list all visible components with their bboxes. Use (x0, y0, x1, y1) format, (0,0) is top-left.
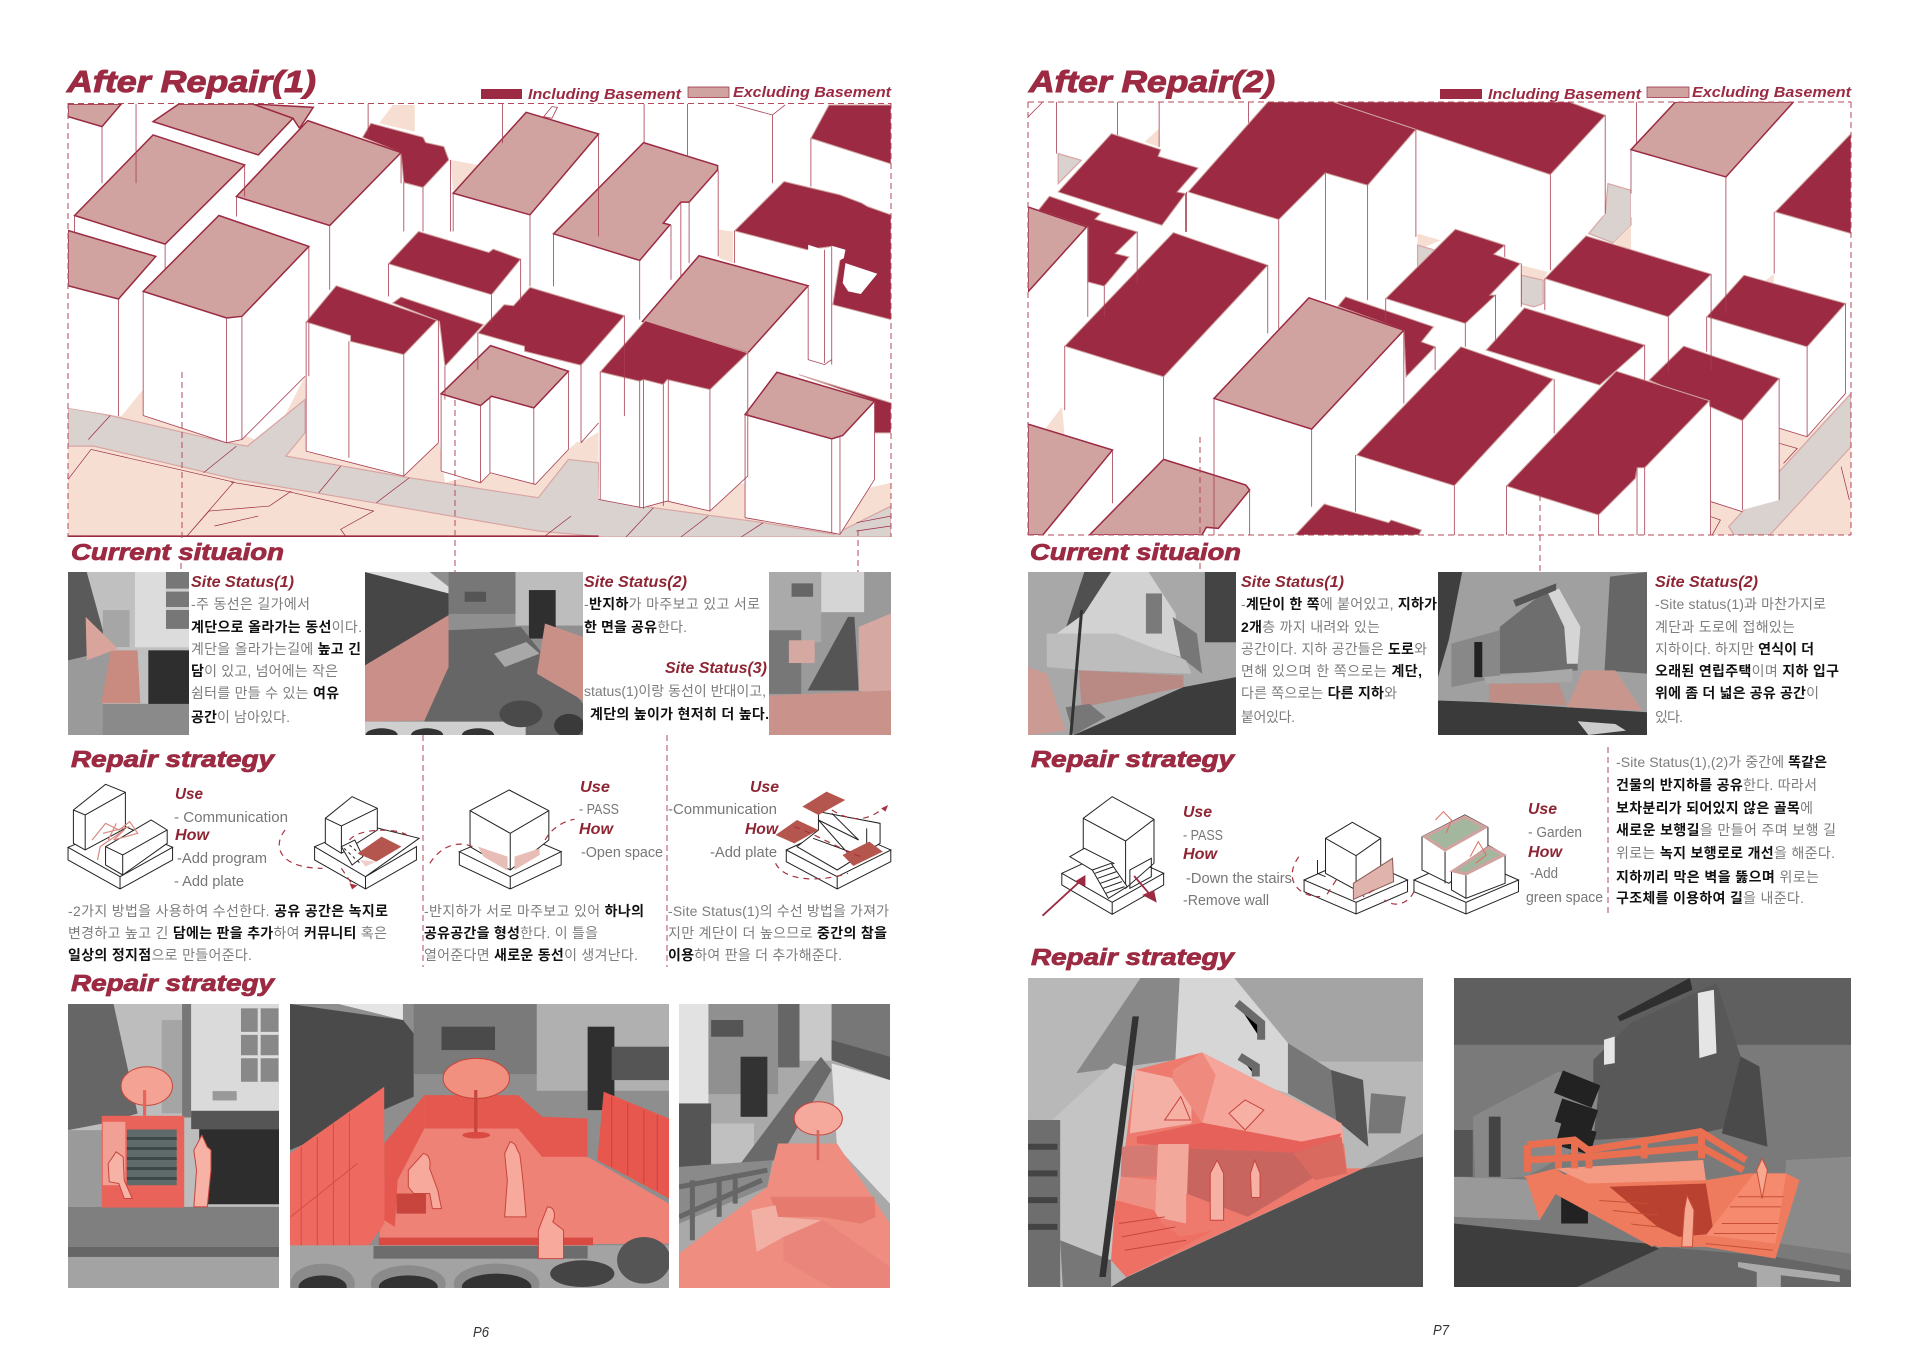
labels: communication and add plate: -Communication (668, 801, 777, 818)
diagram: communication and plates on stepped stair (776, 792, 891, 889)
text: strategy paragraph 2 left (424, 903, 644, 963)
photo: repair render D (1028, 978, 1423, 1287)
text: site status 3 left (584, 660, 769, 722)
photo: repair render C (679, 1004, 890, 1288)
text: site status 1 left: Site Status(1) (191, 574, 294, 591)
labels: pass and open space (579, 779, 663, 861)
text: site status 1 right: 붙어있다. (1241, 709, 1295, 725)
text: site status 1 left: 계단을 올라가는길에 높고 긴 (191, 641, 361, 657)
labels: pass and open space: - PASS (579, 801, 619, 818)
labels: communication and add plate: How (745, 821, 780, 838)
title: After Repair(1): After Repair(1) (66, 64, 316, 99)
text: site status 1 right: Site Status(1) (1241, 574, 1344, 591)
text: site status 2 right: 오래된 연립주택이며 지하 입구 (1655, 663, 1839, 679)
text: site status 1 right: -계단이 한 쪽에 붙어있고, 지하가 (1241, 596, 1437, 612)
text: strategy paragraph right: 새로운 보행길을 만들어 주며 보행 길 (1616, 822, 1836, 838)
legend: left page: Excluding Basement (733, 84, 892, 101)
text: strategy paragraph 1 left: 변경하고 높고 긴 담에는 판을 추가하여 커뮤니티 혹은 (68, 925, 387, 941)
legend: left page: Including Basement (528, 86, 682, 103)
text: site status 1 right: 2개층 까지 내려와 있는 (1241, 619, 1380, 635)
arrows: dashed circulation for first diagrams (279, 830, 408, 889)
page number P7: P7 (1433, 1322, 1450, 1339)
text: site status 2 left: Site Status(2) (584, 574, 687, 591)
photo: site status 2 left (365, 572, 583, 735)
labels: down the stairs: Use (1183, 804, 1212, 821)
labels: first diagram use and how: - Communication (174, 809, 288, 826)
heading: repair strategy 2 right: Repair strategy (1031, 944, 1235, 970)
text: strategy paragraph 1 left: 일상의 정지점으로 만들어준다. (68, 947, 252, 963)
frame and leader lines: right page (1028, 102, 1851, 917)
text: site status 2 left: 한 면을 공유한다. (584, 619, 687, 635)
labels: pass and open space: -Open space (581, 844, 663, 861)
text: site status 2 right: 계단과 도로에 접해있는 (1655, 619, 1795, 635)
legend: left page (481, 84, 892, 103)
text: site status 1 right: 공간이다. 지하 공간들은 도로와 (1241, 641, 1427, 657)
text: strategy paragraph right (1616, 754, 1836, 906)
text: strategy paragraph 3 left: -Site Status(1)의 수선 방법을 가져가 (668, 903, 889, 919)
text: site status 3 left: 계단의 높이가 현저히 더 높다. (590, 706, 769, 722)
text: strategy paragraph right: 지하끼리 막은 벽을 뚫으며 위로는 (1616, 869, 1819, 885)
diagram: down the stairs building (1043, 797, 1164, 916)
heading: current situation left: Current situaion (71, 539, 284, 565)
text: strategy paragraph right: -Site Status(1),(2)가 중간에 똑같은 (1616, 754, 1827, 770)
text: site status 1 left: 담이 있고, 넘어에는 작은 (191, 663, 338, 679)
diagram: garden and remove wall buildings (1292, 812, 1518, 914)
frame and leader lines: left page (68, 103, 891, 967)
labels: down the stairs (1183, 804, 1292, 909)
labels: pass and open space: How (579, 821, 615, 838)
heading: current situation right: Current situaion (1030, 539, 1241, 565)
diagram: communication and add plate, two isometric buildings (68, 784, 419, 889)
diagram: pass and open space cube (430, 790, 575, 889)
text: site status 1 left: 공간이 남아있다. (191, 709, 290, 725)
text: site status 2 right (1655, 574, 1839, 725)
text: site status 1 left: 쉼터를 만들 수 있는 여유 (191, 685, 339, 701)
text: site status 1 left: 계단으로 올라가는 동선이다. (191, 619, 362, 635)
photo: site status 1 right (1028, 572, 1236, 735)
text: strategy paragraph right: 건물의 반지하를 공유한다. 따라서 (1616, 777, 1817, 793)
text: site status 2 right: 지하이다. 하지만 연식이 더 (1655, 641, 1814, 657)
labels: garden (1526, 801, 1603, 906)
isometric map: after repair 1 (68, 104, 891, 537)
text: site status 2 right: Site Status(2) (1655, 574, 1758, 591)
legend: right page: Including Basement (1488, 86, 1642, 103)
text: site status 1 left (191, 574, 362, 725)
isometric map: after repair 2 (1028, 102, 1851, 535)
title: After Repair(2): After Repair(2) (1028, 64, 1275, 99)
legend: right page: Excluding Basement (1692, 84, 1852, 101)
text: site status 1 left: -주 동선은 길가에서 (191, 596, 310, 612)
text: site status 2 left: -반지하가 마주보고 있고 서로 (584, 596, 760, 612)
labels: down the stairs: -Remove wall (1183, 892, 1269, 909)
text: strategy paragraph 1 left: -2가지 방법을 사용하여 수선한다. 공유 공간은 녹지로 (68, 903, 388, 919)
text: strategy paragraph 3 left: 이용하여 판을 더 추가해준다. (668, 947, 842, 963)
text: site status 2 right: -Site status(1)과 마찬가지로 (1655, 596, 1826, 612)
heading: repair strategy left: Repair strategy (71, 746, 275, 772)
photo: repair render B (290, 1004, 669, 1288)
labels: down the stairs: -Down the stairs (1186, 870, 1292, 887)
text: strategy paragraph 2 left: -반지하가 서로 마주보고 있어 하나의 (424, 903, 644, 919)
labels: pass and open space: Use (580, 779, 610, 796)
text: site status 1 right: 면해 있으며 한 쪽으로는 계단, (1241, 663, 1422, 679)
text: strategy paragraph right: 구조체를 이용하여 길을 내준다. (1616, 890, 1804, 906)
photo: site status 1 left (68, 572, 189, 735)
labels: communication and add plate (668, 779, 780, 861)
text: strategy paragraph right: 보차분리가 되어있지 않은 골목에 (1616, 800, 1813, 816)
text: site status 2 left (584, 574, 760, 635)
labels: garden: Use (1528, 801, 1557, 818)
photo: repair render E (1454, 978, 1851, 1287)
legend: right page (1440, 84, 1852, 103)
heading: repair strategy right: Repair strategy (1031, 746, 1235, 772)
labels: first diagram use and how: - Add plate (174, 873, 244, 890)
text: strategy paragraph right: 위로는 녹지 보행로로 개선을 해준다. (1616, 845, 1835, 861)
text: strategy paragraph 3 left (668, 903, 889, 963)
text: site status 1 right (1241, 574, 1437, 725)
text: strategy paragraph 3 left: 지만 계단이 더 높으므로 중간의 참을 (668, 925, 887, 941)
labels: first diagram use and how: Use (175, 786, 203, 803)
text: site status 3 left: status(1)이랑 동선이 반대이고, (584, 683, 766, 699)
text: site status 3 left: Site Status(3) (665, 660, 767, 677)
text: strategy paragraph 1 left (68, 903, 388, 963)
text: site status 2 right: 있다. (1655, 709, 1683, 725)
page number P6: P6 (473, 1324, 490, 1341)
text: strategy paragraph 2 left: 공유공간을 형성한다. 이 틀을 (424, 925, 598, 941)
labels: communication and add plate: -Add plate (710, 844, 777, 861)
labels: garden: green space (1526, 889, 1603, 906)
photo: repair render A (68, 1004, 279, 1288)
photo: site status 3 left (769, 572, 891, 735)
labels: garden: How (1528, 844, 1564, 861)
labels: communication and add plate: Use (750, 779, 779, 796)
text: strategy paragraph 2 left: 열어준다면 새로운 동선이 생겨난다. (424, 947, 638, 963)
text: site status 1 right: 다른 쪽으로는 다른 지하와 (1241, 685, 1397, 701)
labels: garden: - Garden (1528, 824, 1582, 841)
labels: first diagram use and how (174, 786, 288, 890)
labels: down the stairs: How (1183, 846, 1219, 863)
labels: garden: -Add (1530, 865, 1558, 882)
photo: site status 2 right (1438, 572, 1647, 735)
labels: down the stairs: - PASS (1183, 827, 1223, 844)
heading: repair strategy 2 left: Repair strategy (71, 970, 275, 996)
text: site status 2 right: 위에 좀 더 넓은 공유 공간이 (1655, 685, 1819, 701)
labels: first diagram use and how: -Add program (177, 850, 267, 867)
labels: first diagram use and how: How (175, 827, 211, 844)
